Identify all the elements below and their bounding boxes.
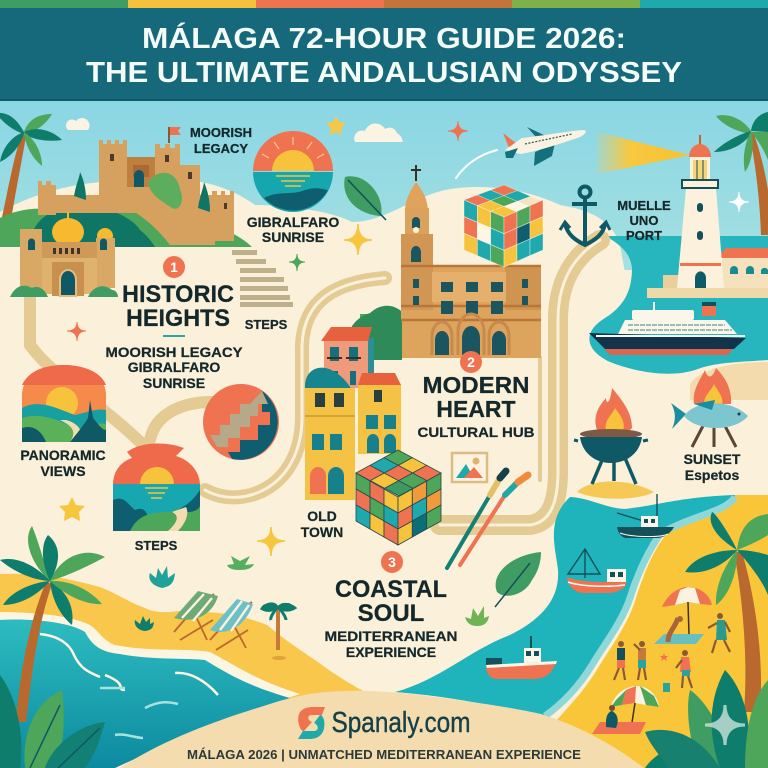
icon: anchor (560, 186, 610, 245)
label: Muelle Uno Port: UNO (630, 213, 658, 228)
cream corner sand below harbour (690, 362, 768, 400)
section 1: Historic Heights: HISTORIC (122, 281, 234, 308)
footer panel: Spanaly.com (332, 707, 470, 739)
cathedral (360, 165, 541, 358)
castle hill and Alcazaba (0, 127, 252, 247)
icon: lower beach umbrella and sunbather (592, 686, 659, 734)
section 2: Modern Heart: 2 (467, 354, 475, 370)
section 3: Coastal Soul: MEDITERRANEAN (324, 628, 458, 644)
icon: airplane (456, 127, 586, 178)
icon: lighthouse beam (597, 132, 690, 174)
icon: beach people (614, 613, 730, 692)
icon: coast sunset scene (113, 443, 200, 531)
foam shoreline (545, 497, 735, 716)
section 1: Historic Heights: HEIGHTS (126, 305, 230, 332)
section 3: Coastal Soul: COASTAL (335, 576, 447, 603)
footer panel: MÁLAGA 2026 | UNMATCHED MEDITERRANEAN EXPERIENCE (187, 747, 581, 762)
footer panel (120, 691, 644, 768)
icon: flagged steps (232, 250, 293, 307)
icon: panoramic views (22, 365, 106, 442)
palace building (10, 212, 118, 297)
section 1: Historic Heights: MOORISH LEGACY (106, 344, 243, 360)
icon: palm top right (714, 112, 768, 235)
icon: deck chairs (174, 591, 253, 650)
section 1: Historic Heights: GIBRALFARO (128, 359, 220, 375)
section 2: Modern Heart: CULTURAL HUB (418, 424, 534, 440)
section 1: Historic Heights (106, 256, 243, 391)
label: Old Town: OLD (307, 508, 337, 524)
label: Muelle Uno Port: MUELLE (617, 198, 671, 213)
icon: tropical foliage bottom right (645, 670, 768, 768)
section 1: Historic Heights: SUNRISE (143, 375, 205, 391)
section 2: Modern Heart: HEART (436, 396, 516, 422)
label: Panoramic Views: VIEWS (40, 463, 86, 479)
left beach (0, 574, 367, 700)
section 2: Modern Heart (418, 351, 534, 440)
label: Moorish Legacy: LEGACY (194, 141, 248, 156)
icon: palm top left (0, 113, 62, 222)
icon: small palm (261, 603, 296, 660)
icon: big palm right beach (685, 512, 768, 712)
icon: grill with flame (574, 388, 654, 499)
icon: fishing boat middle (567, 549, 627, 593)
old town buildings (305, 312, 402, 500)
title banner (0, 8, 768, 101)
label: Muelle Uno Port: PORT (626, 228, 662, 243)
right beach (557, 495, 768, 768)
icon: beach umbrella and sunbather (654, 587, 712, 644)
label: Old Town: TOWN (301, 524, 343, 540)
icon: paint brushes (447, 471, 528, 568)
icon: grass tuft (465, 606, 489, 626)
label: Gibralfaro Sunrise: GIBRALFARO (247, 214, 339, 230)
road network (30, 240, 600, 525)
label: Gibralfaro Sunrise: SUNRISE (262, 229, 324, 245)
icon: puzzle cube over cathedral (464, 185, 544, 267)
icon: beach plants (135, 556, 254, 631)
icon: cruise ship (589, 302, 746, 355)
icon: tropical foliage bottom left (0, 675, 105, 768)
label: Sunset Espetos: Espetos (685, 467, 739, 483)
icon: fishing boat lower (486, 636, 557, 679)
icon: palm bottom left (0, 526, 105, 722)
right sea (395, 495, 735, 716)
icon: Spanaly logo (298, 707, 325, 739)
icon: lighthouse (647, 135, 768, 298)
section 2: Modern Heart: MODERN (422, 372, 530, 398)
icon: stars and sparkles (59, 116, 749, 556)
label: Panoramic Views: PANORAMIC (20, 447, 106, 463)
section 3: Coastal Soul: EXPERIENCE (346, 644, 436, 660)
section 3: Coastal Soul: SOUL (358, 600, 424, 627)
icon: fishing boat top (617, 494, 674, 538)
section 1: Historic Heights: 1 (170, 259, 178, 275)
icon: leaf top (344, 176, 386, 220)
icon: Gibralfaro sunrise circle (253, 131, 333, 212)
section 3: Coastal Soul (324, 551, 458, 660)
top colour strip (0, 0, 768, 8)
label: Steps lower: STEPS (135, 538, 178, 553)
label: Steps upper: STEPS (245, 317, 288, 332)
title banner: MÁLAGA 72-HOUR GUIDE 2026: (142, 21, 626, 55)
icon: grilled fish with flame (671, 368, 748, 447)
title banner: THE ULTIMATE ANDALUSIAN ODYSSEY (86, 57, 682, 89)
sky (0, 100, 768, 380)
harbour sea (589, 236, 768, 374)
icon: leaf lower (495, 552, 541, 607)
left sea with foam (0, 612, 300, 768)
section 3: Coastal Soul: 3 (388, 554, 396, 570)
icon: steps circle (203, 384, 279, 460)
icon: puzzle cube old town (356, 450, 441, 545)
label: Sunset Espetos: SUNSET (684, 451, 741, 467)
icon: clouds (66, 118, 403, 142)
label: Moorish Legacy: MOORISH (190, 125, 252, 140)
icon: picture frame (452, 453, 487, 482)
